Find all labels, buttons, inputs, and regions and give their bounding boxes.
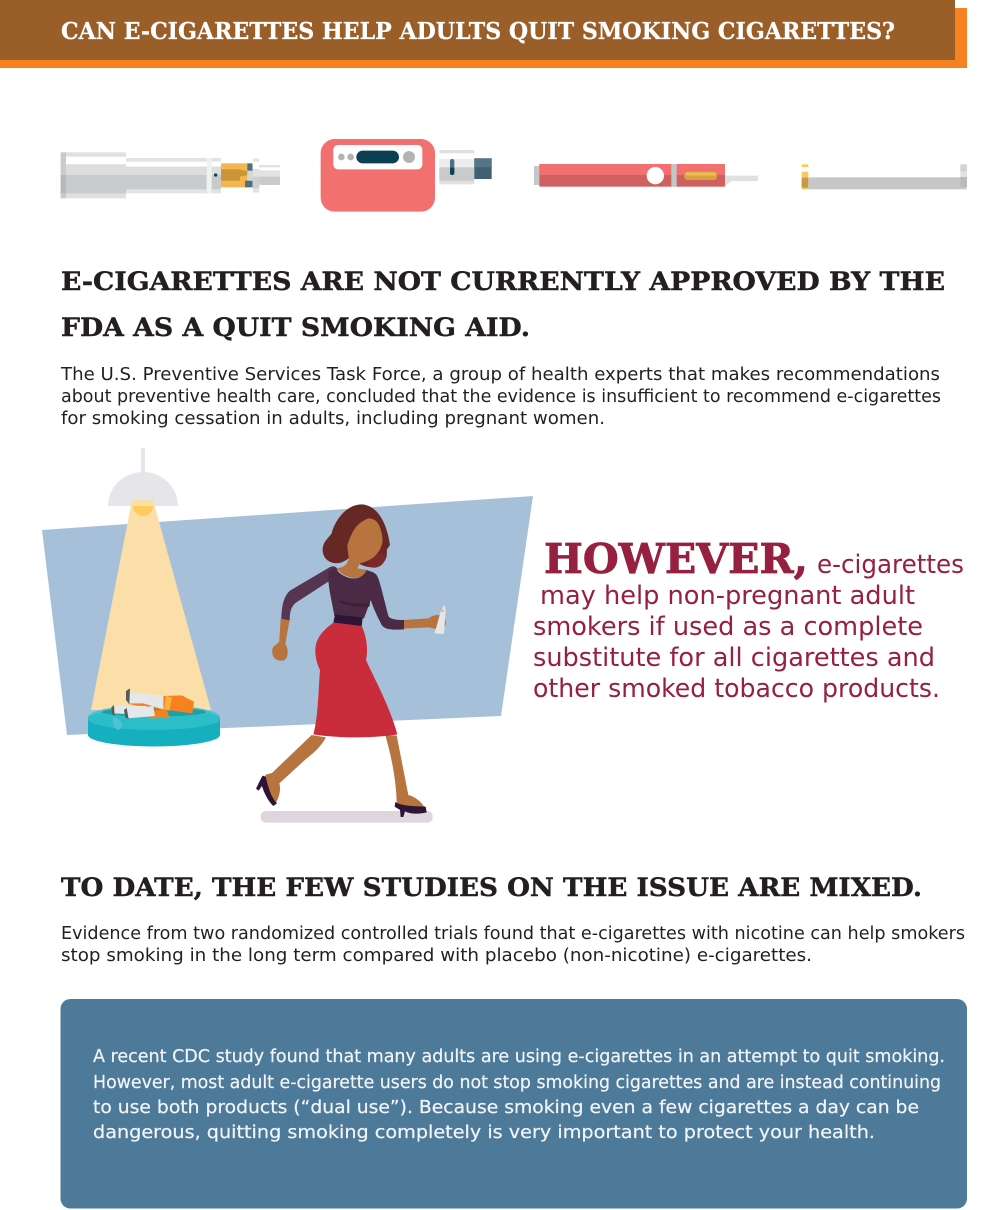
- panel: CDC study: [60, 999, 967, 1208]
- heading: not approved by FDA: FDA AS A QUIT SMOKING AID.: [61, 313, 530, 343]
- belt: [333, 615, 363, 626]
- callout: however: other smoked tobacco products.: [533, 674, 940, 704]
- hair bun: [368, 553, 385, 568]
- back arm skin: [272, 618, 290, 661]
- panel text: However, most adult e-cigarette users do not stop smoking cigarettes and are instead continuing: [93, 1073, 941, 1093]
- callout: however: HOWEVER,: [544, 535, 808, 583]
- text block: randomized controlled trials: Evidence from two randomized controlled trials found that e-cigarettes with nicotine can help smokers: [61, 923, 965, 944]
- skirt: [313, 623, 397, 737]
- face and neck: [337, 518, 383, 578]
- icon: ceiling lamp with light beam: [91, 448, 211, 710]
- callout: however: smokers if used as a complete: [533, 612, 923, 642]
- callout: however: substitute for all cigarettes and: [533, 643, 935, 673]
- text block: task force conclusion: about preventive health care, concluded that the evidence is insufficient to recommend e-cigarettes: [61, 386, 941, 407]
- icon: ashtray with cigarette butts: [88, 688, 220, 746]
- heading: not approved by FDA: E-CIGARETTES ARE NOT CURRENTLY APPROVED BY THE: [61, 267, 945, 297]
- back shoe: [256, 776, 277, 806]
- text block: task force conclusion: The U.S. Preventive Services Task Force, a group of health experts that makes recommendations: [60, 364, 940, 385]
- hair: [323, 504, 390, 567]
- text block: task force conclusion: [60, 364, 941, 429]
- back sleeve: [281, 566, 338, 620]
- header banner: [0, 0, 967, 68]
- heading: studies are mixed: TO DATE, THE FEW STUDIES ON THE ISSUE ARE MIXED.: [61, 873, 922, 903]
- e-cigarette in hand: [435, 605, 446, 634]
- text block: randomized controlled trials: stop smoking in the long term compared with placebo (non-nicotine) e-cigarettes.: [61, 945, 812, 966]
- icon: box mod e-cigarette: [321, 139, 492, 212]
- text block: task force conclusion: for smoking cessation in adults, including pregnant women.: [61, 408, 605, 429]
- torso: [328, 567, 375, 618]
- callout: however: [533, 535, 964, 704]
- front sleeve: [368, 573, 404, 630]
- ground shadow: [261, 811, 433, 823]
- illustration: walking woman holding e-cigarette: [256, 504, 446, 823]
- icon: cigarette-style e-cigarette: [802, 164, 967, 189]
- back leg: [265, 735, 326, 803]
- front forearm and hand: [403, 615, 446, 629]
- icon: vape pen e-cigarette: [534, 164, 758, 187]
- panel text: [93, 1047, 945, 1143]
- blue background shape: [42, 496, 533, 735]
- panel text: dangerous, quitting smoking completely is very important to protect your health.: [93, 1123, 875, 1143]
- panel text: to use both products (“dual use”). Because smoking even a few cigarettes a day can be: [93, 1098, 919, 1118]
- front leg: [385, 735, 425, 808]
- icon: tube mod e-cigarette: [61, 152, 280, 198]
- text block: randomized controlled trials: [61, 923, 965, 966]
- front shoe: [395, 802, 427, 817]
- title: CAN E-CIGARETTES HELP ADULTS QUIT SMOKING CIGARETTES?: [61, 17, 895, 45]
- panel text: A recent CDC study found that many adults are using e-cigarettes in an attempt to quit smoking.: [93, 1047, 945, 1067]
- heading: not approved by FDA: [61, 267, 945, 343]
- callout: however: e-cigarettes: [817, 550, 964, 580]
- callout: however: may help non-pregnant adult: [540, 581, 915, 611]
